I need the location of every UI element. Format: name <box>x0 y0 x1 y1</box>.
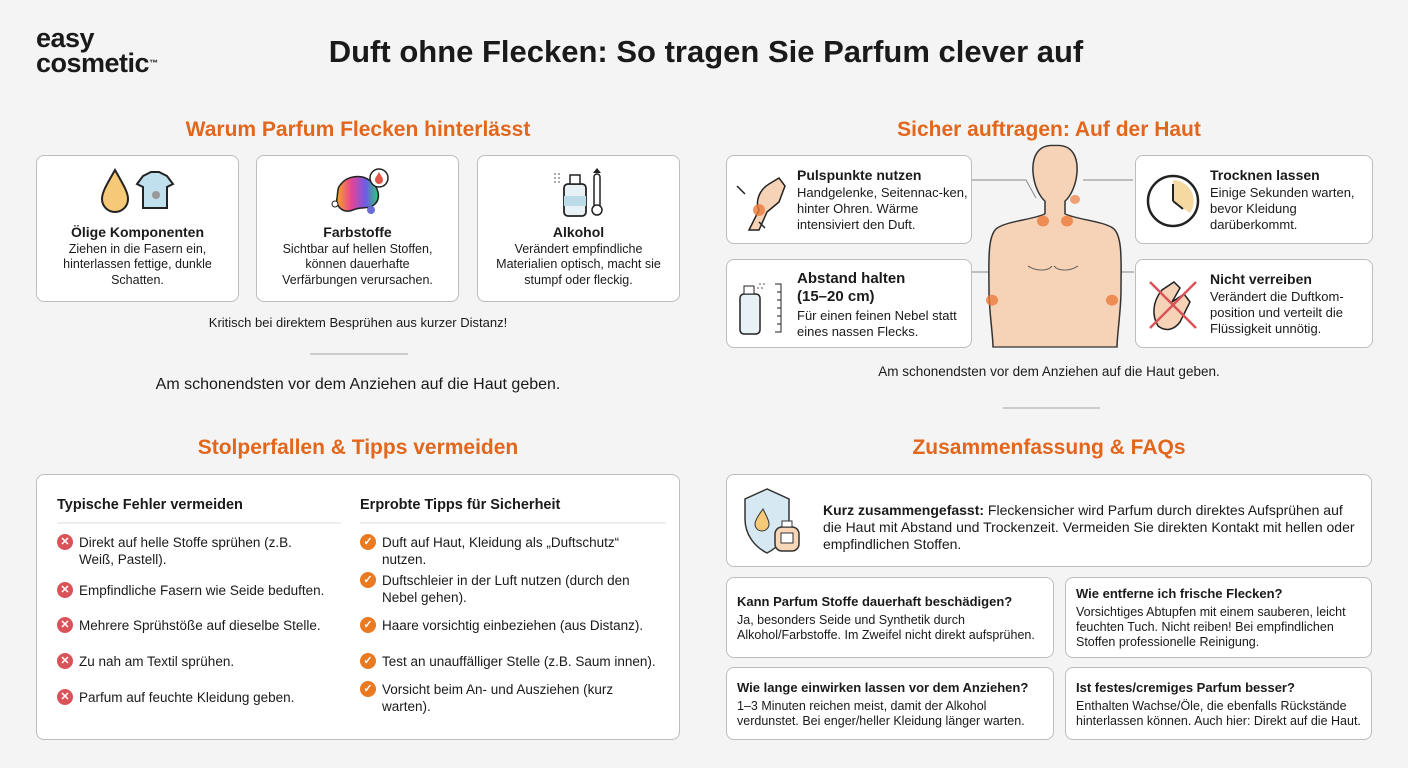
icon: spray and thermometer <box>554 168 603 217</box>
card: distance: (15–20 cm) <box>797 288 875 305</box>
faq: damage: Kann Parfum Stoffe dauerhaft beschädigen? <box>737 594 1012 609</box>
icon: clock <box>1146 174 1200 228</box>
note: critical: Kritisch bei direktem Besprühen aus kurzer Distanz! <box>209 315 507 330</box>
logo: easy <box>36 23 94 53</box>
faq: damage <box>726 577 1054 658</box>
heading: pitfalls: Stolperfallen & Tipps vermeiden <box>198 436 518 459</box>
column: mistakes: Direkt auf helle Stoffe sprühen (z.B. Weiß, Pastell). <box>79 535 292 567</box>
card: oily <box>36 155 239 302</box>
note: right: Am schonendsten vor dem Anziehen auf die Haut geben. <box>878 364 1220 379</box>
logo: cosmetic™ <box>36 48 158 78</box>
card: oily: Ölige Komponenten <box>71 224 204 240</box>
card: let dry: Trocknen lassen <box>1210 167 1320 183</box>
note: best on skin: Am schonendsten vor dem Anziehen auf die Haut geben. <box>156 376 560 393</box>
faq: remove stains: Vorsichtiges Abtupfen mit einem sauberen, leicht feuchten Tuch. Nicht reiben! Bei empfindlichen Stoffen professionelle Reinigung. <box>1076 605 1346 649</box>
column: tips: ✓ <box>363 619 373 631</box>
faq: how long <box>726 667 1054 740</box>
panel: summary: Kurz zusammengefasst: Fleckensicher wird Parfum durch direktes Aufsprühen auf die Haut mit Abstand und Trockenzeit. Vermeiden Sie direkten Kontakt mit hellen oder empfindlichen Stoffen. <box>823 502 1355 552</box>
faq: solid perfume <box>1065 667 1372 740</box>
column: tips <box>360 497 666 714</box>
column: mistakes: Typische Fehler vermeiden <box>57 497 243 513</box>
heading: apply on skin: Sicher auftragen: Auf der Haut <box>897 118 1201 141</box>
column: mistakes: ✕ <box>60 584 70 596</box>
card: distance: Abstand halten <box>797 270 905 287</box>
body figure <box>972 144 1134 348</box>
heading: why stains: Warum Parfum Flecken hinterlässt <box>186 118 530 141</box>
column: tips: Duftschleier in der Luft nutzen (durch den Nebel gehen). <box>382 573 630 605</box>
column: mistakes: ✕ <box>60 536 70 548</box>
faq: how long: Wie lange einwirken lassen vor dem Anziehen? <box>737 680 1028 695</box>
column: tips: ✓ <box>363 683 373 695</box>
card: alcohol: Verändert empfindliche Materialien optisch, macht sie stumpf oder fleckig. <box>496 242 661 286</box>
card: distance: Für einen feinen Nebel statt eines nassen Flecks. <box>797 308 957 339</box>
icon: shield with perfume <box>744 488 800 554</box>
faq: how long: 1–3 Minuten reichen meist, damit der Alkohol verdunstet. Bei enger/heller Kleidung länger warten. <box>737 699 1025 728</box>
faq: damage: Ja, besonders Seide und Synthetik durch Alkohol/Farbstoffe. Im Zweifel nicht direkt aufsprühen. <box>737 613 1035 642</box>
column: tips: Vorsicht beim An- und Ausziehen (kurz warten). <box>382 682 613 714</box>
logo <box>36 23 158 78</box>
title: Duft ohne Flecken: So tragen Sie Parfum clever auf <box>329 34 1083 69</box>
card: dyes <box>256 155 459 302</box>
panel: pitfalls <box>36 474 680 740</box>
card: let dry <box>1135 155 1373 244</box>
faq: solid perfume: Enthalten Wachse/Öle, die ebenfalls Rückstände hinterlassen können. Auch hier: Direkt auf die Haut. <box>1076 699 1361 728</box>
card: alcohol <box>477 155 680 302</box>
card: pulse points: Pulspunkte nutzen <box>797 167 921 183</box>
icon: color splash <box>332 168 389 214</box>
column: mistakes: Mehrere Sprühstöße auf dieselbe Stelle. <box>79 618 321 633</box>
card: oily: Ziehen in die Fasern ein, hinterlassen fettige, dunkle Schatten. <box>63 242 212 286</box>
card: let dry: Einige Sekunden warten, bevor Kleidung darüberkommt. <box>1210 185 1355 232</box>
card: pulse points: Handgelenke, Seitennac-ken, hinter Ohren. Wärme intensiviert den Duft. <box>797 185 968 232</box>
icon: hands crossed <box>1149 281 1197 330</box>
column: mistakes: Zu nah am Textil sprühen. <box>79 654 234 669</box>
card: alcohol: Alkohol <box>553 224 604 240</box>
column: tips: ✓ <box>363 574 373 586</box>
column: tips: Test an unauffälliger Stelle (z.B. Saum innen). <box>382 654 656 669</box>
column: tips: ✓ <box>363 655 373 667</box>
column: mistakes: Parfum auf feuchte Kleidung geben. <box>79 690 294 705</box>
column: tips: Erprobte Tipps für Sicherheit <box>360 497 560 513</box>
card: dyes: Sichtbar auf hellen Stoffen, können dauerhafte Verfärbungen verursachen. <box>282 242 433 286</box>
card: do not rub <box>1135 259 1373 348</box>
column: tips: ✓ <box>363 536 373 548</box>
card: dyes: Farbstoffe <box>323 224 392 240</box>
column: tips: Haare vorsichtig einbeziehen (aus Distanz). <box>382 618 643 633</box>
panel: summary <box>726 474 1372 567</box>
column: tips: Duft auf Haut, Kleidung als „Duftschutz“ nutzen. <box>382 535 619 567</box>
icon: spray bottle with ruler <box>739 284 782 335</box>
card: distance <box>726 259 972 348</box>
column: mistakes: ✕ <box>60 655 70 667</box>
card: do not rub: Nicht verreiben <box>1210 271 1312 287</box>
faq: remove stains: Wie entferne ich frische Flecken? <box>1076 586 1283 601</box>
column: mistakes: Empfindliche Fasern wie Seide beduften. <box>79 583 324 598</box>
icon: drop and shirt <box>101 168 174 213</box>
card: do not rub: Verändert die Duftkom-position und verteilt die Flüssigkeit unnötig. <box>1210 289 1344 336</box>
faq: remove stains <box>1065 577 1372 658</box>
column: mistakes: ✕ <box>60 619 70 631</box>
faq: solid perfume: Ist festes/cremiges Parfum besser? <box>1076 680 1295 695</box>
card: pulse points <box>726 155 972 244</box>
column: mistakes: ✕ <box>60 691 70 703</box>
column: mistakes <box>57 497 341 705</box>
heading: summary: Zusammenfassung & FAQs <box>912 436 1186 459</box>
icon: wrist <box>736 177 786 231</box>
